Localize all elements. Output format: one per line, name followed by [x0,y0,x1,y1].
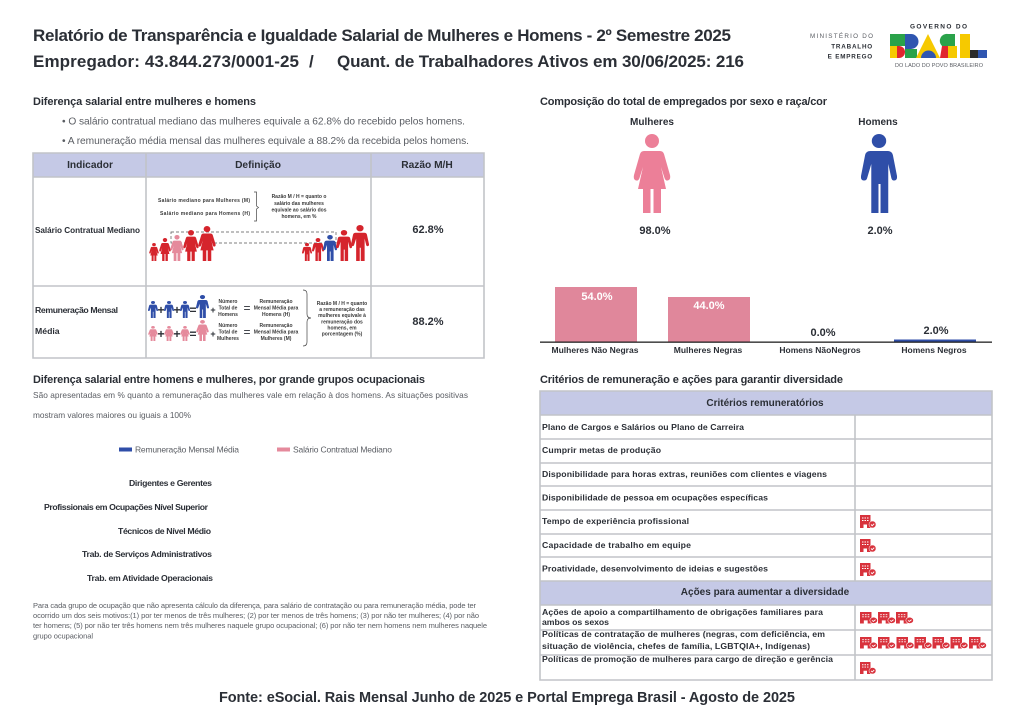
footnote: grupo ocupacional [33,632,93,640]
bullet points: • A remuneração média mensal das mulheres equivale a 88.2% da recebida pelos homens. [62,136,469,147]
panel: critérios de remuneração e ações [540,374,992,680]
table: indicadores: Indicador [67,160,113,171]
diagram: remuneração média: remuneração dos [321,320,363,326]
diagram: remuneração média: + [173,327,181,341]
table: critérios remuneratórios: Capacidade de trabalho em equipe [542,540,691,550]
diagram: remuneração média: + [157,327,165,341]
table: indicadores: Razão M/H [401,160,453,171]
diagram: remuneração média: Remuneração [259,323,293,329]
bullet points [62,116,469,147]
table: critérios remuneratórios: Critérios remuneratórios [706,398,824,409]
table: critérios remuneratórios: Ações para aumentar a diversidade [681,587,850,598]
table: critérios remuneratórios [540,391,992,680]
diagram: remuneração média [148,290,367,346]
diagram: remuneração média: Remuneração [259,299,293,305]
bar chart: raça/cor: Homens NãoNegros [779,345,861,355]
description: São apresentadas em % quanto a remuneração das mulheres vale em relação à dos homens. As situações positivas [33,390,468,400]
bullet points: • O salário contratual mediano das mulheres equivale a 62.8% do recebido pelos homens. [62,116,465,128]
diagram: remuneração média: = [189,303,197,317]
diagram: salário mediano: salário das mulheres [274,201,324,207]
occupation categories: Trab. de Serviços Administrativos [82,549,212,559]
diagram: remuneração média: = [243,325,251,339]
diagram: remuneração média: Mensal Média para [254,330,298,336]
diagram: remuneração média: + [157,303,165,317]
title: Quant. de Trabalhadores Ativos em 30/06/2025: 216 [337,52,744,71]
value: mulheres: 98.0% [639,225,671,237]
bar chart: raça/cor: 44.0% [693,300,725,312]
logo: governo do brasil: DO LADO DO POVO BRASILEIRO [895,63,984,69]
heading: Diferença salarial entre homens e mulheres, por grande grupos ocupacionais [33,374,425,386]
description: mostram valores maiores ou iguais a 100% [33,410,192,420]
diagram: remuneração média: Homens [218,312,238,318]
bar chart: raça/cor: 54.0% [581,291,613,303]
title [33,26,744,71]
bar chart: raça/cor: 0.0% [810,327,836,339]
table: critérios remuneratórios: Disponibilidade de pessoa em ocupações específicas [542,492,768,502]
diagram: remuneração média: Mulheres [217,336,239,342]
legend [119,444,392,454]
title: / [309,52,314,71]
footnote [33,601,487,640]
diagram: remuneração média: Homens (H) [262,312,290,318]
icon: homem [861,134,897,213]
bar chart: raça/cor: Homens Negros [901,345,967,355]
table: critérios remuneratórios: Plano de Cargos e Salários ou Plano de Carreira [542,422,744,432]
diagram: remuneração média: a remuneração das [319,307,365,313]
title: Relatório de Transparência e Igualdade Salarial de Mulheres e Homens - 2º Semestre 2025 [33,26,731,45]
table: indicadores: Definição [235,160,281,171]
description [33,390,468,420]
occupation categories [44,478,213,583]
table: indicadores: 88.2% [412,316,444,328]
table: critérios remuneratórios: Proatividade, desenvolvimento de ideias e sugestões [542,564,768,574]
diagram: remuneração média: Total de [219,330,238,336]
legend: Remuneração Mensal Média [135,444,239,454]
diagram: salário mediano: Razão M / H = quanto o [272,194,326,200]
logo: ministério do trabalho e emprego [810,31,873,60]
bar chart: raça/cor: 2.0% [923,325,949,337]
diagram: remuneração média: mulheres equivale à [318,313,366,319]
value: homens: 2.0% [867,225,893,237]
icons: empresas [860,515,986,674]
occupation categories: Técnicos de Nível Médio [118,526,211,536]
table: critérios remuneratórios: Ações de apoio a compartilhamento de obrigações familiares para [542,607,823,617]
heading: Composição do total de empregados por sexo e raça/cor [540,96,828,108]
diagram: remuneração média: + [210,305,216,315]
diagram: salário mediano: equivale ao salário dos [271,208,327,214]
diagram: remuneração média: Razão M / H = quanto [317,301,367,307]
panel: composição por sexo e raça/cor [540,96,992,355]
occupation categories: Trab. em Atividade Operacionais [87,573,213,583]
table: critérios remuneratórios: Disponibilidade para horas extras, reuniões com clientes e viagens [542,469,827,479]
logo: governo do brasil: GOVERNO DO [910,24,967,30]
diagram: remuneração média: = [243,301,251,315]
table: critérios remuneratórios: ambos os sexos [542,617,609,627]
table: indicadores [33,153,484,358]
panel: diferença salarial entre mulheres e homens [33,96,484,358]
footnote: ter homens; (5) por não ter três homens nem três mulheres naquele grupo ocupacional; (6) por não ter nem homens nem mulheres naquele [33,621,487,630]
table: indicadores: Média [35,326,60,336]
logo: ministério do trabalho e emprego: TRABALHO [831,44,873,50]
diagram: remuneração média: Total de [219,306,238,312]
table: indicadores: 62.8% [412,224,444,236]
bar chart: raça/cor: Mulheres Negras [674,345,743,355]
diagram: remuneração média: = [189,327,197,341]
panel: diferença por grandes grupos ocupacionais [33,374,487,640]
table: indicadores: Salário Contratual Mediano [35,226,140,235]
diagram: remuneração média: Número [219,299,237,305]
logo: ministério do trabalho e emprego: MINISTÉRIO DO [810,31,873,40]
label: mulheres: Mulheres [630,117,674,128]
diagram: salário mediano [149,192,369,261]
table: critérios remuneratórios: Políticas de contratação de mulheres (negras, com deficiência, em [542,629,825,639]
table: critérios remuneratórios: Políticas de promoção de mulheres para cargo de direção e gerência [542,654,833,664]
table: critérios remuneratórios: situação de violência, chefes de família, LGBTQIA+, Indígenas) [542,641,810,651]
bar chart: raça/cor: Mulheres Não Negras [552,345,639,355]
diagram: salário mediano: homens, em % [281,214,317,220]
logo: governo do brasil [890,24,987,69]
diagram: remuneração média: Mensal Média para [254,306,298,312]
table: critérios remuneratórios: Cumprir metas de produção [542,445,661,455]
diagram: remuneração média: + [210,329,216,339]
diagram: remuneração média: Número [219,323,237,329]
diagram: remuneração média: Mulheres (M) [261,336,292,342]
table: indicadores: Remuneração Mensal [35,305,118,315]
logo: ministério do trabalho e emprego: E EMPREGO [828,54,873,60]
occupation categories: Profissionais em Ocupações Nível Superior [44,502,209,512]
diagram: remuneração média: homens, em [327,326,357,332]
heading: Diferença salarial entre mulheres e homens [33,96,256,108]
diagram: remuneração média: porcentagem (%) [322,332,363,338]
legend: Salário Contratual Mediano [293,444,392,454]
footnote: Para cada grupo de ocupação que não apresenta cálculo da diferença, para salário de contratação ou para remuneração média, pode ter [33,601,476,610]
heading: Critérios de remuneração e ações para garantir diversidade [540,374,843,386]
footnote: ocorrido um dos seis motivos:(1) por ter menos de três mulheres; (2) por ter menos de três homens; (3) por não ter mulheres; (4) por não [33,611,479,620]
occupation categories: Dirigentes e Gerentes [129,478,212,488]
footer source: Fonte: eSocial. Rais Mensal Junho de 2025 e Portal Emprega Brasil - Agosto de 2025 [219,690,795,706]
icon: mulher [634,134,670,213]
title: Empregador: 43.844.273/0001-25 [33,52,299,71]
table: critérios remuneratórios: Tempo de experiência profissional [542,516,689,526]
diagram: salário mediano: Salário mediano para Mulheres (M) [158,198,250,204]
bar chart: raça/cor [540,287,992,355]
diagram: salário mediano: Salário mediano para Homens (H) [160,211,250,217]
diagram: remuneração média: + [173,303,181,317]
label: homens: Homens [858,117,898,128]
